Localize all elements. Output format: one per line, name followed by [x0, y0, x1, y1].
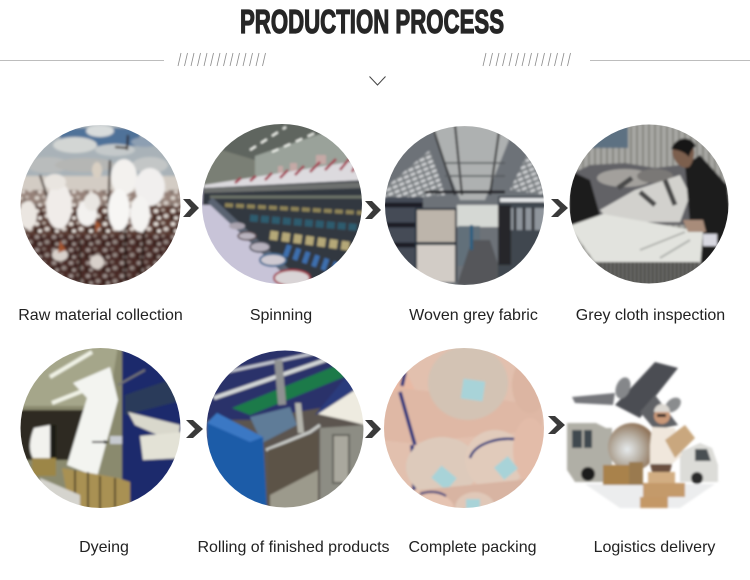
panel: logistics delivery [567, 362, 718, 556]
panel: rolling of finished products [197, 348, 390, 556]
panel: dyeing [18, 346, 184, 556]
ground shadow [585, 484, 715, 508]
photo: fabric rolling machine [205, 348, 365, 510]
header divider [0, 53, 750, 66]
panel: raw material collection [18, 124, 184, 324]
photo: logistics collage [567, 362, 718, 508]
label: Logistics delivery [594, 539, 715, 556]
title: PRODUCTION PROCESS [240, 3, 504, 40]
arrow 4 [186, 420, 203, 438]
arrow 2 [365, 201, 381, 219]
globe [608, 423, 656, 471]
panel: complete packing [382, 346, 548, 556]
arrow 1 [183, 199, 199, 217]
panel: woven grey fabric [383, 125, 548, 324]
photo: cotton field [18, 124, 184, 290]
arrow 3 [551, 199, 568, 217]
arrow 5 [365, 420, 381, 438]
delivery man [650, 427, 682, 464]
photo: spinning mill [200, 122, 365, 286]
photo: weaving workshop [383, 125, 548, 287]
label: Complete packing [408, 539, 537, 556]
panel: spinning [200, 122, 365, 324]
photo: packed fabric rolls [384, 348, 544, 508]
plane [572, 362, 684, 430]
truck [567, 423, 612, 482]
label: Dyeing [79, 539, 129, 556]
label: Rolling of finished products [197, 539, 390, 556]
icon: down chevron [370, 76, 386, 85]
boxes [603, 465, 631, 485]
label: Grey cloth inspection [576, 307, 725, 324]
van [680, 443, 718, 482]
label: Raw material collection [18, 307, 183, 324]
panel: grey cloth inspection [569, 122, 735, 324]
photo: fabric inspection [569, 122, 735, 290]
photo: dyeing machine [18, 346, 184, 510]
label: Woven grey fabric [409, 307, 538, 324]
arrow 6 [548, 416, 565, 434]
label: Spinning [250, 307, 312, 324]
